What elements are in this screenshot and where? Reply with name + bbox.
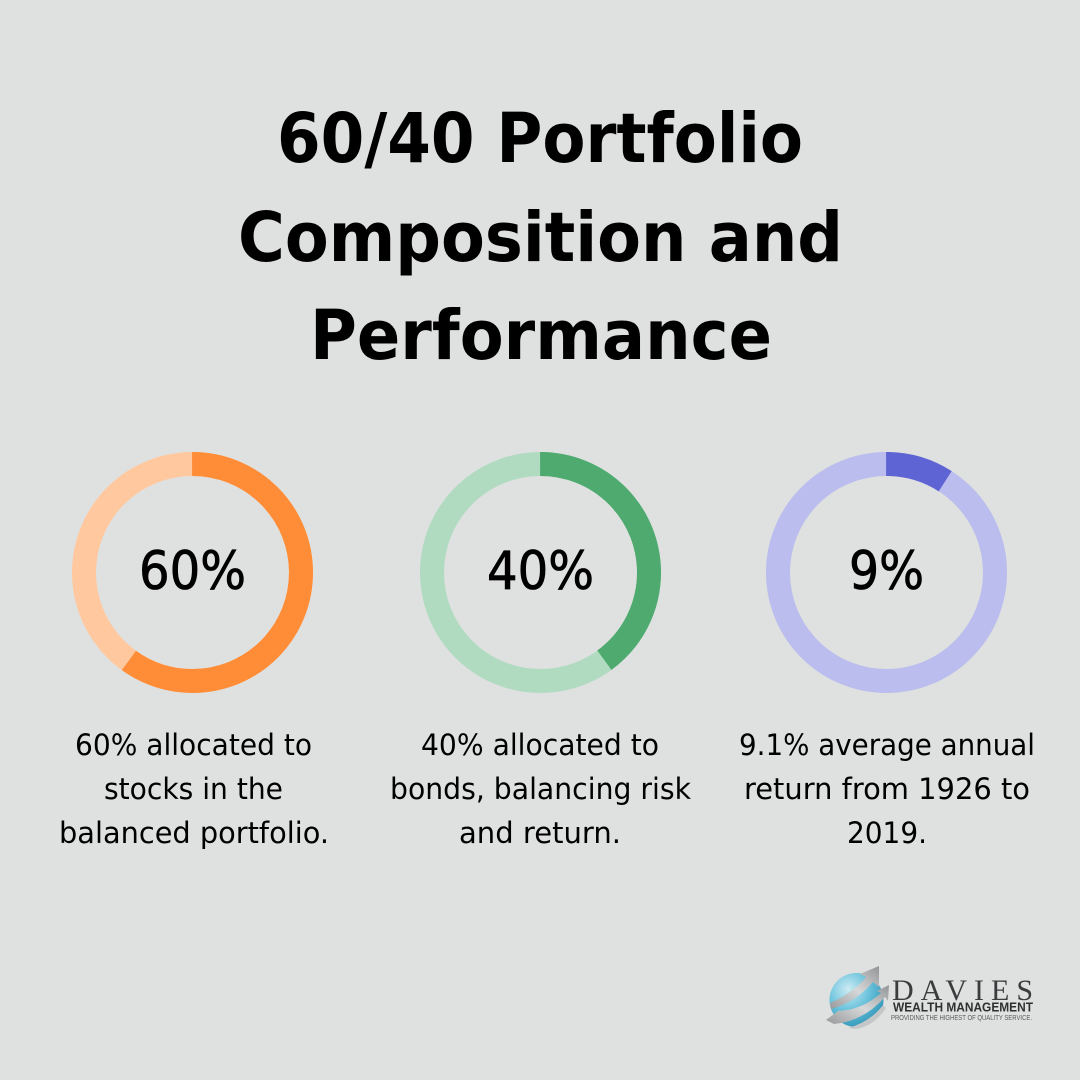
- logo wordmark: DAVIES: [892, 974, 1033, 1007]
- title: Composition and: [238, 198, 843, 278]
- donut chart: 9%: [778, 464, 995, 681]
- description: return: return from 1926 to: [744, 772, 1030, 806]
- value: 40%: 40%: [487, 541, 594, 602]
- panel: 40% bonds: [390, 464, 691, 850]
- panel: 60% stocks: [59, 464, 329, 850]
- description: bonds: 40% allocated to: [421, 728, 659, 762]
- logo tagline: PROVIDING THE HIGHEST OF QUALITY SERVICE.: [891, 1015, 1032, 1022]
- description: stocks: [59, 728, 329, 850]
- description: bonds: [390, 728, 691, 850]
- logo subtitle: WEALTH MANAGEMENT: [893, 1000, 1033, 1014]
- title: 60/40 Portfolio: [277, 99, 803, 179]
- donut chart: 60%: [84, 464, 301, 681]
- value: 9%: 9%: [849, 541, 924, 602]
- logo: Davies Wealth Management: [826, 966, 1033, 1029]
- description: stocks: 60% allocated to: [75, 728, 312, 762]
- donut chart: 40%: [432, 464, 649, 681]
- value: 60%: 60%: [139, 541, 246, 602]
- panel: 9% return: [739, 464, 1035, 850]
- description: return: [739, 728, 1035, 850]
- description: bonds: bonds, balancing risk: [390, 772, 691, 806]
- description: bonds: and return.: [459, 816, 621, 850]
- description: stocks: stocks in the: [104, 772, 283, 806]
- icon: globe with arrows: [826, 966, 889, 1029]
- description: return: 9.1% average annual: [739, 728, 1035, 762]
- title: [238, 99, 843, 376]
- title: Performance: [310, 296, 772, 376]
- description: stocks: balanced portfolio.: [59, 816, 329, 850]
- description: return: 2019.: [847, 816, 927, 850]
